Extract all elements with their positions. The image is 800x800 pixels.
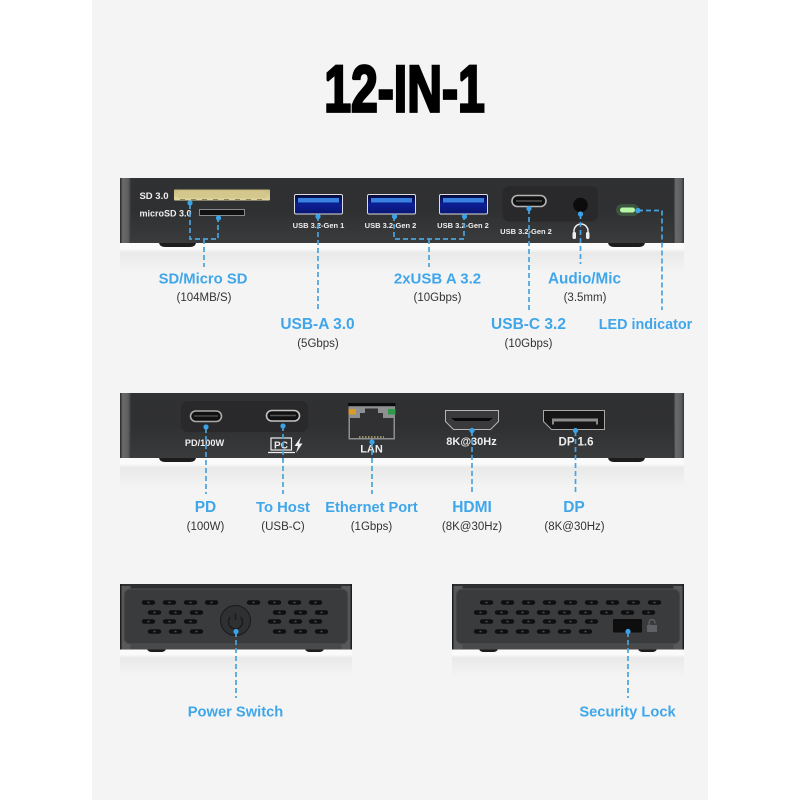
- rubber feet: [159, 458, 645, 462]
- rubber feet: [479, 649, 657, 652]
- DisplayPort port: [544, 410, 604, 448]
- reflection: [452, 649, 684, 677]
- card reader labels: SD 3.0: [139, 191, 169, 202]
- callout: HDMI: (8K@30Hz): [442, 521, 502, 533]
- Ethernet port: [348, 403, 396, 456]
- callout: USB-C 3.2: [491, 206, 566, 350]
- icon: padlock: [647, 620, 657, 632]
- housing: [120, 393, 684, 458]
- microSD slot: [200, 210, 244, 216]
- housing: [452, 584, 684, 650]
- callout: PD: PD: [195, 499, 216, 516]
- callout: Security Lock: Security Lock: [579, 704, 676, 720]
- USB-C host port: [266, 410, 300, 421]
- callout: HDMI: [442, 428, 502, 533]
- callout: SD / Micro SD: (104MB/S): [177, 292, 232, 304]
- icon: headphones: [572, 224, 590, 239]
- USB-A port 3: USB 3.2-Gen 2: [437, 221, 489, 230]
- USB-C port: [500, 196, 552, 236]
- callout: USB-C 3.2: USB-C 3.2: [491, 316, 566, 333]
- callout: To Host: To Host: [256, 500, 310, 516]
- USB-A port 1: USB 3.2-Gen 1: [293, 221, 344, 230]
- housing: [120, 584, 352, 650]
- rubber feet: [147, 649, 324, 652]
- device: rear view with PD, host, LAN, HDMI and DP ports: [120, 393, 684, 488]
- callout: Ethernet Port: Ethernet Port: [325, 500, 418, 516]
- callout: To Host: (USB-C): [261, 521, 305, 533]
- callout: USB-A 3.0: [280, 214, 355, 350]
- USB-A port 3: [437, 194, 489, 230]
- callout: 2xUSB A 3.2: (10Gbps): [414, 292, 462, 304]
- HDMI port: 8K@30Hz: [446, 436, 497, 448]
- USB-A port 2: USB 3.2-Gen 2: [365, 221, 416, 230]
- callout: To Host: [256, 423, 310, 533]
- device: side view with security lock: [452, 584, 684, 677]
- callout: 2xUSB A 3.2: 2xUSB A 3.2: [394, 270, 481, 288]
- title: 12-IN-1: [324, 53, 485, 126]
- card reader labels: microSD 3.0: [139, 208, 192, 218]
- callout: PD: [187, 424, 225, 533]
- HDMI port: [446, 410, 498, 448]
- USB-C port: USB 3.2-Gen 2: [500, 227, 552, 236]
- device: front view with card readers and USB ports: [120, 178, 684, 273]
- callout: 2xUSB A 3.2: [392, 214, 481, 304]
- reflection: [120, 243, 684, 273]
- callout: USB-A 3.0: (5Gbps): [297, 338, 339, 350]
- ventilation slots: [144, 602, 326, 632]
- callout: USB-A 3.0: USB-A 3.0: [280, 316, 355, 333]
- recessed USB-C and audio panel: [502, 186, 598, 222]
- rubber feet: [159, 243, 645, 247]
- ventilation slots: [476, 602, 659, 632]
- USB-C PD port: PD/100W: [185, 438, 224, 448]
- callout: Ethernet Port: [325, 439, 418, 533]
- USB-A port 2: [365, 194, 416, 230]
- callout: Audio/Mic: (3.5mm): [564, 292, 607, 304]
- callout: SD / Micro SD: [159, 200, 248, 304]
- card reader labels: [139, 191, 192, 218]
- callout: Audio/Mic: Audio/Mic: [548, 270, 622, 288]
- reflection: [120, 649, 352, 677]
- background panel: [92, 0, 708, 800]
- icon: PC and bolt: PC: [274, 440, 288, 452]
- callout: SD / Micro SD: SD/Micro SD: [159, 272, 248, 288]
- security lock slot: [613, 619, 642, 632]
- Ethernet port: LAN: [360, 444, 383, 456]
- DisplayPort port: DP 1.6: [559, 436, 593, 448]
- callout: DP: (8K@30Hz): [544, 521, 605, 533]
- callout: Ethernet Port: (1Gbps): [351, 521, 392, 533]
- icon: PC and bolt: [268, 437, 302, 453]
- audio jack: [573, 198, 588, 212]
- device: side view with power switch: [120, 584, 352, 677]
- callout: Audio/Mic: [548, 211, 622, 304]
- power button: [220, 606, 250, 636]
- reflection: [120, 458, 684, 488]
- housing: [120, 178, 684, 243]
- callout: Power Switch: [188, 629, 283, 720]
- LED indicator: [616, 204, 639, 216]
- USB-C PD port: [185, 411, 224, 448]
- callout: Power Switch: Power Switch: [188, 704, 283, 720]
- callout: DP: DP: [563, 499, 585, 516]
- callout: PD: (100W): [187, 521, 225, 533]
- callout: LED indicator: [599, 208, 693, 333]
- SD slot: [174, 190, 270, 200]
- USB-A port 1: [293, 194, 344, 230]
- callout: Security Lock: [579, 629, 676, 720]
- callout: HDMI: HDMI: [452, 499, 492, 516]
- callout: DP: [544, 428, 605, 533]
- callout: LED indicator: LED indicator: [599, 317, 693, 333]
- recessed USB-C panel: [181, 401, 308, 432]
- callout: USB-C 3.2: (10Gbps): [505, 338, 553, 350]
